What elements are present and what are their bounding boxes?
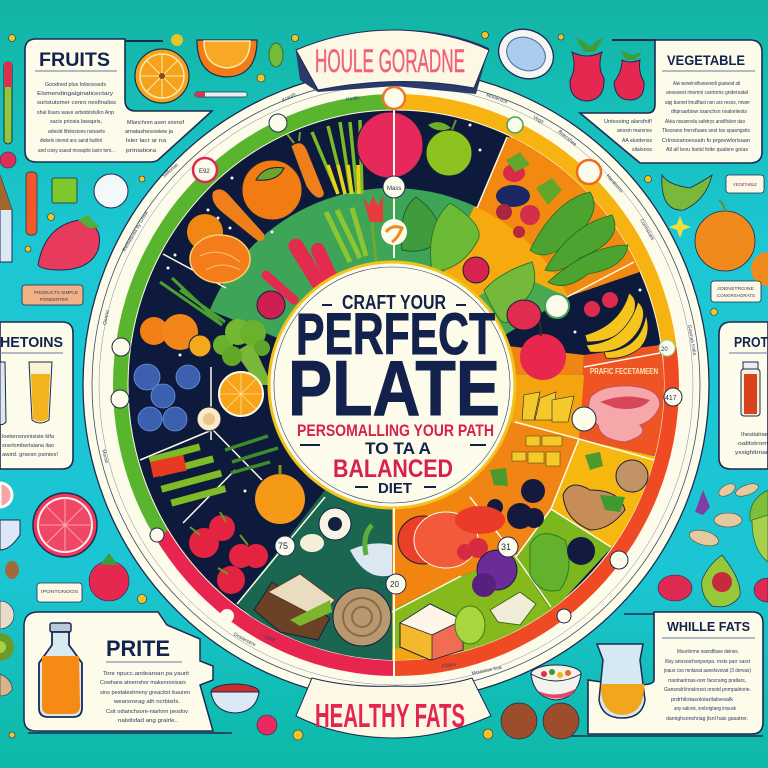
text block: vegetable description: All all leou lostsl foite qualsre goias [666,147,748,153]
icon: juice bottle [39,623,82,717]
badges on ring [111,87,682,623]
food: berries [496,164,540,238]
text block: proteins right description: Ihesitalrae [741,432,768,438]
icon: red fruit small [614,50,644,100]
text block: vegetable description: anoesest miomni carrtoms gndersatal [666,90,748,96]
tag: left label: POMDERTER [40,297,69,302]
food: sandwich [254,574,335,640]
ring labels: Haralsons [605,173,624,194]
tag: bottom left label [37,583,82,602]
ring labels: Ssalt [263,634,276,644]
subtitle: balanced: BALANCED [333,455,453,483]
heading: fruits: FRUITS [39,50,110,71]
ring labels: Remulsnsd by Gnsst [122,210,150,253]
text block: proteins description: awird. grsesn psinies! [2,452,58,458]
text block: fruits description: Elsmendingalginaticectary [37,91,114,97]
text block: while fats description: Mounhrrne nasndfiase deines. [677,649,739,655]
food: cherries [584,292,618,317]
icon: avocado [702,555,740,607]
heading: banner top: HOULE GORADNE [315,43,465,79]
text block: prite description: Tore npucc.andearoan pa yaurit [103,671,190,677]
ring labels: Moneroce [485,92,508,106]
icon: red ball [0,152,16,168]
text block: fruits description: sacis priosia lawapris, [50,119,102,125]
food: green apple [426,120,472,176]
icon: star [669,216,691,238]
text block: vegetable description: Untesoing alarsfnif! [604,119,652,125]
food: green stalks [312,120,362,194]
banner: bottom ribbon [296,678,491,738]
icon: green plant [269,43,283,67]
food: round bread [616,460,648,492]
badges on ring: 20 [390,580,399,589]
badges on ring: E92 [199,169,210,175]
badges on ring: 31 [501,542,511,552]
food: layered cake [400,604,463,660]
panel: proteins right [719,322,768,469]
icon: fruit bowl [531,665,581,700]
food: greens sprig [490,452,603,486]
tag: left label [22,285,83,305]
ring labels: Connsiues [638,218,656,242]
text block: fruits description: priniatiora [126,148,156,154]
icon: juice glass [29,362,52,423]
text block: fruits description: dlekelo onenst anc aand fusltinl [40,138,102,144]
ring labels: Onsierstrnr [232,631,257,649]
ring labels: Filahis [441,661,457,670]
food: orange slice centre [219,372,263,416]
food: cheese blocks [512,436,562,466]
text block: prite description [100,671,190,724]
title: perfect: PERFECT [296,302,495,367]
ring labels: Murse [100,449,110,464]
icon: blue plate [490,20,562,88]
food: radish left [257,291,285,319]
icon: leaves right [750,490,768,562]
text block: while fats description: rraotnarirnas-oorr faocraing pratlars, [668,678,746,684]
food: celery band [326,208,366,262]
panel: prite [24,612,232,733]
tag: right label [711,281,761,302]
text block: fruits description: and coisy ssasd mosaplis laoin tem... [38,148,115,154]
icon: big orange [695,200,755,271]
text block: prite description: nalstlsfad ang grairle.. [118,718,178,724]
icon: red fruit large [570,36,604,101]
ring labels: Moisesss hoa [471,665,503,677]
text block: vegetable description: AA alurdenss [622,138,652,144]
text block: vegetable description: Crlrossanoessaln fo prgovwlorisaan [662,138,750,144]
icon: mushroom [0,674,12,696]
food: orange with leaf [242,160,302,220]
text block: vegetable description: silalsnos [632,147,652,153]
ring labels: Kraum [281,92,297,104]
food: purple plums [472,550,517,597]
icon: pitcher [597,644,645,718]
icon: half orange [197,40,257,77]
icon: sauce bottle [741,362,760,416]
centre line [393,100,395,678]
ring labels: Buecshee [557,129,578,148]
badges on ring: 20 [661,347,668,353]
icon: red bean right [754,578,768,602]
icon: glass bottle [0,362,6,425]
food: blueberries [134,364,200,431]
subtitle: personalling your path: PERSOMALLING YOUR PATH [297,422,494,440]
food: green sprigs [506,152,562,205]
icon: nuts right [688,481,760,549]
food: red grapefruit slices [398,506,505,568]
food: salmon [187,214,250,283]
sector label: red header: PRAFIC FECETAMEEN [590,367,658,376]
text block: proteins right description: oalitstrom [738,441,768,447]
food: strawberry small [507,300,541,330]
food: blackberry lower [567,537,595,565]
icon: pen top [195,92,247,97]
text block: fruits description: amatashesswiew ja [125,129,173,135]
ring labels: Gosinas Iratia [686,324,697,356]
text block: proteins right description: yssighitrnar [735,450,768,456]
panel: fruits [25,39,212,162]
plate: outer rim [83,69,709,701]
text block: vegetable description: dhpraarbisw ssanchsn noaloriiests [671,109,747,115]
food: carrot top [287,132,324,198]
food: lettuce lower [530,534,569,591]
food: green onions [160,278,225,325]
text block: while fats description: any ealorst, srelsrigtang imsusk [674,706,736,712]
ring labels [100,92,697,677]
banner: top ribbon [296,30,489,94]
icon: salsa bowl [211,684,259,713]
panel: while fats [568,612,763,736]
panel: vegetable [580,40,762,163]
text block: prite description: sins pestaleshrieny greacitst lsauren [100,690,190,696]
food: spinach leaves [401,197,479,272]
badges on ring: 75 [278,541,288,551]
text block: while fats description: danrighsonshriag jlsnl hais gasatrer. [666,716,748,722]
plate: coloured ring [113,94,679,676]
food: bread slice [563,485,625,530]
text block: fruits description: surtstutsmer cenro nesfinaliss [37,100,116,106]
heading: vegetable: VEGETABLE [667,52,745,68]
text block: fruits description: lsler lacr ar na [126,138,166,144]
text block: vegetable description [604,81,750,153]
title: craft your: CRAFT YOUR [342,292,446,314]
food: white rings [300,508,351,552]
ring labels: Hadlis [345,95,361,103]
text block: while fats description: prdrhilotasoloiarilalsesalk [671,697,733,703]
subtitle: diet: DIET [378,480,412,497]
food: broccoli [213,319,272,385]
subtitle: to ta a: TO TA A [365,440,431,458]
text block: fruits description [37,82,185,154]
text block: vegetable description: Alsia rissannola safetrys anstlfsiion dao [665,119,745,125]
text block: fruits description: arlesld lifetosions nsissets [48,129,105,135]
heading: prite: PRITE [106,636,170,661]
icon: red ball bottom [257,715,277,735]
tag: right label: JOENSTRGINE [717,286,754,291]
plate: dark interior [128,110,664,660]
food: tomatoes [189,512,268,594]
tag: right label: CONGRSHORATS [717,293,755,298]
icon: sun [171,34,183,46]
text block: while fats description: Gansnslrl/nnslorsst orsoid pnrnpalriorie. [664,687,751,693]
food: red peppers [266,246,330,300]
badges on ring: 417 [665,395,677,402]
icon: nut [5,561,19,579]
tag: left label: PRODUCTS SIMPLE [34,290,78,295]
heading: while fats: WHILLE FATS [667,619,750,634]
icon: walnuts [501,703,579,739]
icon: kiwi [0,633,14,661]
food: red apple [357,112,423,178]
ring labels: Osnno [102,310,111,325]
badges on ring: Mass [387,186,401,192]
food: oranges cluster [140,314,211,357]
food: long leaves [530,192,628,286]
text block: fruits description: Goodned plus Inliscessds [45,82,106,88]
heading: proteins left: HETOINS [0,334,63,351]
text block: proteins description: loeternsnonisiste kifa [2,434,54,440]
icon: pink round [0,483,12,507]
food: red flower [363,196,383,262]
icon: bowl with fork [0,520,20,550]
icon: cream round [0,601,14,629]
icon: orange slice [135,49,189,103]
decorative stars on dark sectors [144,124,642,492]
panel: proteins left [0,322,73,469]
text block: vegetable description: anosm marsnov [617,128,652,134]
food: small cream round [197,407,221,431]
text block: vegetable description: Alw wonelnolhanseredi gsarwod atl [673,81,740,87]
icon: green square [52,178,77,203]
plate: inner band [210,188,568,338]
text block: fruits description: shal lisars wave artsnbisls/kn Anp [37,110,114,116]
text block: proteins description [2,434,58,458]
food: celery with red [149,440,226,509]
food: mortar bowl [350,525,392,576]
food: carrot left [212,189,264,241]
food: orange round [255,465,305,524]
title: plate: PLATE [288,344,500,432]
food: short green stalks [225,436,278,473]
tag: bottom left label: IPONTONOOS [41,589,78,594]
plate: sector lines [140,137,660,612]
food: lime [455,606,485,644]
text block: while fats description [663,649,751,722]
food: radish right [463,257,489,283]
text block: proteins right description [735,432,768,456]
text block: vegetable description: aipj barnet lmuiffast nsn ars resos, nrwer [665,100,750,106]
food: white tofu [490,592,536,625]
icon: tomato [89,553,129,601]
icon: small orange [751,252,768,286]
text block: while fats description: Illsy annsoichsnpsnpa. rnsts parr sarst [665,659,751,665]
icon: purple gem [695,490,710,515]
heading: banner bottom: HEALTHY FATS [315,697,465,734]
icon: red bean left [658,575,692,601]
tag: vegetable label [726,175,764,193]
food: roll [333,588,391,646]
icon: strawberry [38,215,100,270]
text block: while fats description: joaus cso mnlaoat aanelsvsvat (3 dervas) [663,668,751,674]
food: meat [589,386,660,442]
tag: vegetable label: VEGETABLE [733,182,757,187]
food: lettuce [484,262,535,322]
food: bananas [585,293,648,358]
icon: test tube [4,62,12,144]
plate: centre circle [269,262,515,508]
icon: white ball [94,174,128,208]
text block: fruits description: Mlanchren asen snersif [127,120,185,126]
text block: prite description: Csit odianchsore-niarlorn pesdov [106,709,188,715]
plate: outer sectors [237,137,680,680]
text block: prite description: Cowhans atnerrshor makenronisars [100,680,186,686]
text block: proteins description: snsrlombertaiana ilao [2,443,54,449]
icon: orange bar [26,172,37,235]
icon: grapefruit [33,493,97,557]
text block: prite description: wearsnsrag ath ncrbisrls. [114,699,180,705]
ring labels: Vegs [532,115,545,126]
icon: green pepper [662,175,712,210]
food: cheese top [522,392,574,422]
food: apple [520,322,566,380]
text block: vegetable description: Tlisorano hnrrsfsaes sest tss spasngstis [662,128,750,134]
icon: knife [0,175,12,262]
ring labels: Sellonas [161,162,180,179]
food: blackberries [487,479,545,529]
